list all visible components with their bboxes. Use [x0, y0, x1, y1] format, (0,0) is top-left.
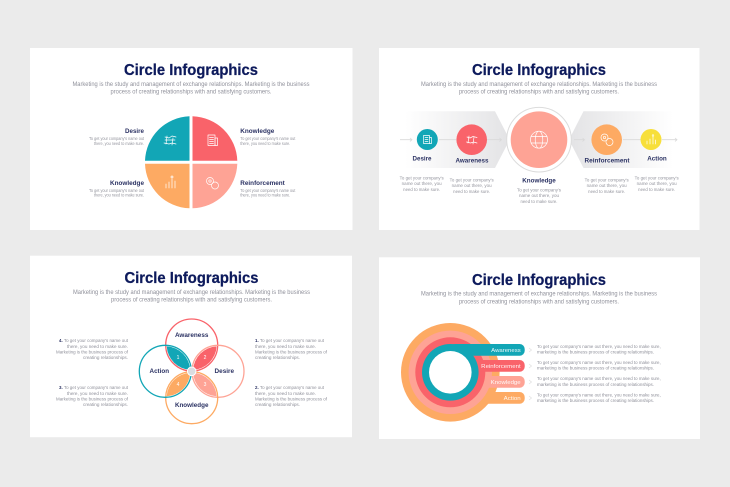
step labels: Knowledge: [522, 178, 556, 184]
subtitle: [72, 81, 310, 96]
circle labels: Desire: [215, 368, 234, 375]
description: Knowledge: To get your company's name out there, you need to make sure,: [537, 376, 661, 381]
description: Awareness: need to make sure.: [453, 189, 490, 194]
description: Awareness: name out there, you: [452, 183, 492, 188]
step circle: Action: [640, 129, 662, 150]
step labels: Desire: [412, 155, 432, 162]
label: Knowledge left: [89, 180, 145, 197]
description: Desire: name out there, you: [402, 181, 442, 186]
circle: Awareness: [166, 319, 218, 371]
panel: four-quadrant circle: [30, 48, 352, 230]
label: Knowledge right: there, you need to make sure.: [240, 141, 290, 146]
subtitle: process of creating relationships with and satisfying customers.: [110, 88, 272, 96]
subtitle: Marketing is the study and management of exchange relationships. Marketing is the business: [421, 81, 657, 88]
circle: Knowledge: [166, 372, 218, 424]
petal numbers: 1: [177, 355, 180, 361]
label: Knowledge right: To get your company's name out: [240, 136, 296, 141]
circle labels: Knowledge: [175, 402, 209, 409]
text: point 2: [255, 385, 328, 407]
step circle: Awareness: [456, 124, 487, 155]
text: point 4: Marketing is the business process of: [56, 350, 129, 354]
petal numbers: [177, 355, 207, 388]
circle: Action: [139, 345, 191, 397]
step labels: Awareness: [456, 158, 489, 164]
bar labels: Knowledge: [491, 380, 521, 386]
connector arrows: [400, 138, 677, 141]
panel: five-step circle timeline: [379, 48, 700, 230]
text: point 4: creating relationships.: [83, 355, 128, 360]
description: Desire: need to make sure.: [403, 187, 440, 192]
description: Desire: [400, 176, 444, 192]
step labels: Action: [647, 155, 667, 162]
text: point 3: 3. To get your company's name out: [59, 385, 129, 390]
description: Knowledge: need to make sure.: [520, 199, 558, 204]
description: Reinforcement: [537, 360, 661, 370]
text: point 2: there, you need to make sure.: [255, 391, 316, 396]
description: Action: [635, 176, 679, 192]
text: point 3: Marketing is the business process of: [56, 396, 129, 402]
icon: people growth: [166, 176, 175, 188]
label: Desire: [89, 128, 145, 146]
text: point 3: there, you need to make sure.: [67, 391, 128, 396]
description: Awareness: To get your company's: [450, 178, 494, 182]
step circle: Reinforcement: [591, 124, 622, 155]
description: Action: marketing is the business process of creating relationships.: [537, 398, 654, 403]
description: Awareness: marketing is the business process of creating relationships.: [537, 350, 654, 354]
description: Action: To get your company's: [635, 176, 679, 180]
subtitle: [73, 289, 310, 304]
label: Reinforcement: To get your company's name out: [240, 188, 296, 193]
petal numbers: 4: [177, 382, 180, 388]
description: Awareness: [450, 178, 494, 194]
description: Reinforcement: [585, 178, 629, 194]
center hole: [429, 351, 472, 394]
text: point 1: there, you need to make sure.: [255, 344, 316, 349]
description: Action: need to make sure.: [638, 187, 675, 192]
center dot: [187, 367, 196, 376]
circle labels: Awareness: [175, 332, 209, 339]
description: Desire: To get your company's: [400, 176, 444, 180]
petal 3: [193, 373, 217, 396]
description: Reinforcement: To get your company's: [585, 178, 629, 182]
chevrons: [529, 348, 532, 400]
text: point 3: [56, 385, 129, 407]
text: point 4: 4. To get your company's name out: [59, 338, 129, 343]
description: Knowledge: [537, 376, 661, 387]
text: point 1: creating relationships.: [255, 355, 300, 360]
icon: growth: [647, 135, 656, 144]
right gradient hexagon: [569, 111, 673, 168]
icon: document: [208, 135, 218, 146]
description: Knowledge: To get your company's: [517, 188, 561, 192]
subtitle: process of creating relationships with and satisfying customers.: [111, 296, 272, 304]
icon: gears: [601, 134, 613, 146]
label: Knowledge right: [240, 128, 296, 146]
description: Knowledge: name out there, you: [519, 193, 560, 198]
description: Knowledge: [517, 188, 561, 204]
description: Reinforcement: To get your company's name out there, you need to make sure,: [537, 360, 661, 365]
left gradient hexagon: [405, 111, 510, 168]
text: point 1: Marketing is the business process of: [255, 350, 328, 354]
icon: gears: [206, 178, 218, 189]
circle: Desire: [192, 345, 244, 397]
text: point 4: there, you need to make sure.: [67, 344, 128, 349]
text: point 2: 2. To get your company's name out: [255, 385, 325, 390]
petal 4: [167, 373, 190, 396]
label: Knowledge left: there, you need to make sure.: [94, 192, 144, 197]
subtitle: process of creating relationships with and satisfying customers.: [459, 298, 619, 305]
icon: handshake: [466, 136, 477, 144]
text: point 3: creating relationships.: [83, 402, 128, 407]
description: Reinforcement: need to make sure.: [588, 189, 625, 194]
title: Circle Infographics: [124, 62, 258, 79]
label: Reinforcement: there, you need to make sure.: [240, 192, 290, 197]
quadrant: orange: [145, 164, 190, 208]
text: point 2: Marketing is the business process of: [255, 396, 328, 402]
title: Circle Infographics: [124, 270, 258, 287]
quadrant: teal: [145, 116, 190, 161]
step labels: Reinforcement: [584, 158, 630, 164]
text: point 2: creating relationships.: [255, 402, 300, 407]
petal 1: [167, 346, 190, 370]
subtitle: [421, 81, 657, 96]
description: Action: To get your company's name out there, you need to make sure,: [537, 392, 661, 398]
label: Reinforcement: [240, 180, 296, 197]
description: Action: [537, 392, 661, 403]
description: Action: name out there, you: [637, 181, 677, 186]
subtitle: [421, 291, 657, 305]
label: Knowledge right: Knowledge: [240, 128, 275, 135]
description: Awareness: [537, 344, 661, 354]
label: Desire: To get your company's name out: [89, 136, 145, 141]
description: Knowledge: marketing is the business process of creating relationships.: [537, 382, 654, 387]
knowledge ring: [507, 107, 571, 172]
step labels: [412, 155, 667, 184]
label: Knowledge left: To get your company's name out: [89, 188, 145, 193]
circle labels: Action: [150, 368, 169, 375]
quadrant: red: [192, 116, 237, 161]
text: point 1: [255, 338, 328, 360]
panel: overlapping circles: [30, 256, 352, 437]
ring and bar: Action: [401, 323, 525, 422]
ring and bar: Reinforcement: [415, 337, 525, 407]
label: Knowledge left: Knowledge: [110, 180, 144, 187]
title: Circle Infographics: [472, 272, 606, 289]
petal 2: [193, 346, 217, 370]
petal numbers: 2: [204, 355, 207, 361]
subtitle: Marketing is the study and management of exchange relationships. Marketing is the business: [73, 289, 310, 296]
subtitle: Marketing is the study and management of exchange relationships. Marketing is the business: [421, 291, 657, 298]
ring and bar: Knowledge: [409, 331, 525, 414]
title: Circle Infographics: [472, 62, 606, 79]
subtitle: process of creating relationships with and satisfying customers.: [459, 88, 619, 96]
description: Awareness: To get your company's name out there, you need to make sure,: [537, 344, 661, 349]
petal numbers: 3: [204, 382, 207, 388]
bar labels: [481, 348, 521, 402]
panel: concentric circle bars: [379, 257, 700, 439]
bar labels: Reinforcement: [481, 364, 521, 370]
label: Desire: Desire: [125, 128, 144, 135]
quadrant: salmon: [192, 164, 237, 208]
description: Reinforcement: name out there, you: [587, 183, 627, 188]
label: Desire: there, you need to make sure.: [94, 141, 144, 146]
text: point 4: [56, 338, 129, 360]
label: Reinforcement: Reinforcement: [240, 180, 286, 187]
ring and bar: Awareness: [422, 344, 525, 401]
circle labels: [150, 332, 234, 409]
step circle: Desire: [417, 129, 438, 150]
step circle: Knowledge: [511, 111, 567, 168]
description: Reinforcement: marketing is the business process of creating relationships.: [537, 366, 654, 370]
subtitle: Marketing is the study and management of exchange relationships. Marketing is the business: [72, 81, 310, 88]
icon: globe: [530, 131, 548, 148]
icon: document: [424, 136, 432, 144]
icon: handshake: [164, 136, 176, 145]
text: point 1: 1. To get your company's name out: [255, 338, 325, 343]
bar labels: Action: [504, 396, 521, 402]
bar labels: Awareness: [491, 348, 521, 354]
